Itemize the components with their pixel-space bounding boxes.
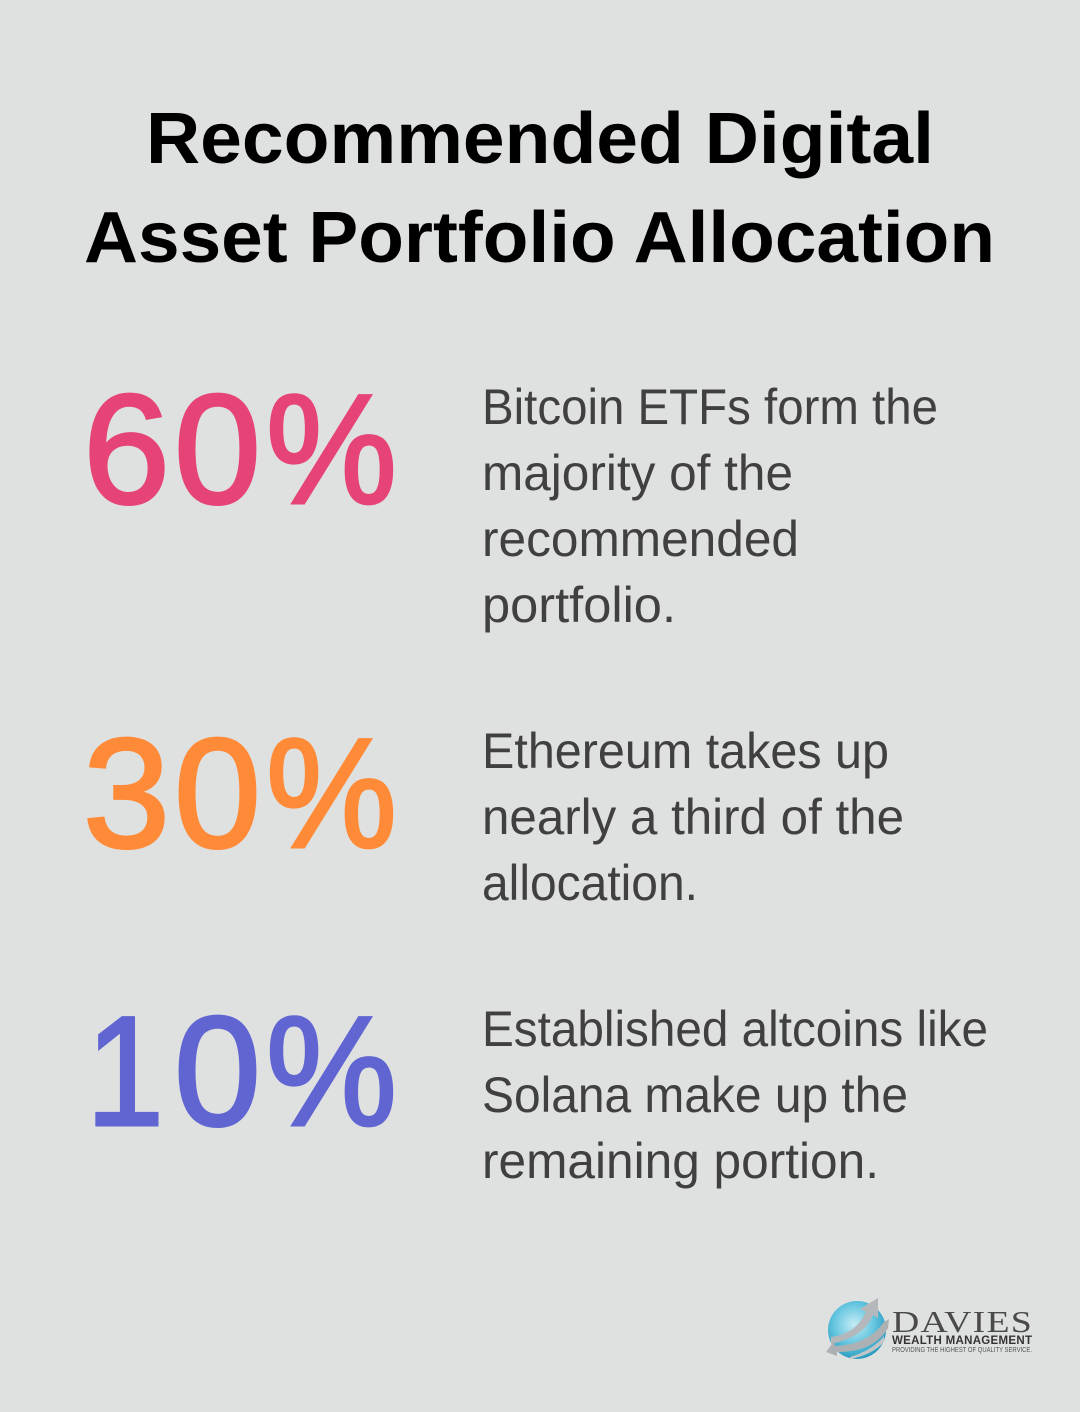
title: Asset Portfolio Allocation [84, 198, 995, 278]
text: 30% description [482, 723, 904, 911]
stat: 60%: % [266, 363, 397, 537]
stat: 10%: 0 [174, 985, 261, 1159]
text: 60% description: majority of the [482, 445, 793, 501]
stat: 10% [86, 985, 397, 1159]
logo subtitle: WEALTH MANAGEMENT [892, 1335, 1032, 1347]
stat: 10%: 1 [86, 985, 164, 1159]
text: 60% description: recommended [482, 511, 799, 567]
text: 10% description: Solana make up the [482, 1067, 908, 1123]
text: 60% description: portfolio. [482, 577, 676, 633]
stat: 60%: 6 [83, 363, 170, 537]
stat: 30%: 0 [174, 707, 261, 881]
text: 30% description: allocation. [482, 855, 698, 911]
title: Recommended Digital [146, 99, 934, 179]
text: 30% description: Ethereum takes up [482, 723, 889, 779]
text: 60% description: Bitcoin ETFs form the [482, 379, 938, 435]
text: 30% description: nearly a third of the [482, 789, 904, 845]
text: 10% description [482, 1001, 988, 1189]
stat: 30%: % [266, 707, 397, 881]
stat: 30% [83, 707, 397, 881]
icon: globe with arrows [826, 1298, 889, 1359]
title [84, 99, 995, 278]
logo: Davies Wealth Management [826, 1298, 1033, 1359]
text: 10% description: remaining portion. [482, 1133, 879, 1189]
stat: 10%: % [266, 985, 397, 1159]
text: 60% description [482, 379, 938, 633]
stat: 30%: 3 [83, 707, 170, 881]
stat: 60% [83, 363, 397, 537]
logo tagline: PROVIDING THE HIGHEST OF QUALITY SERVICE. [892, 1347, 1032, 1354]
text: 10% description: Established altcoins like [482, 1001, 988, 1057]
stat: 60%: 0 [174, 363, 261, 537]
logo wordmark: DAVIES [892, 1304, 1033, 1339]
